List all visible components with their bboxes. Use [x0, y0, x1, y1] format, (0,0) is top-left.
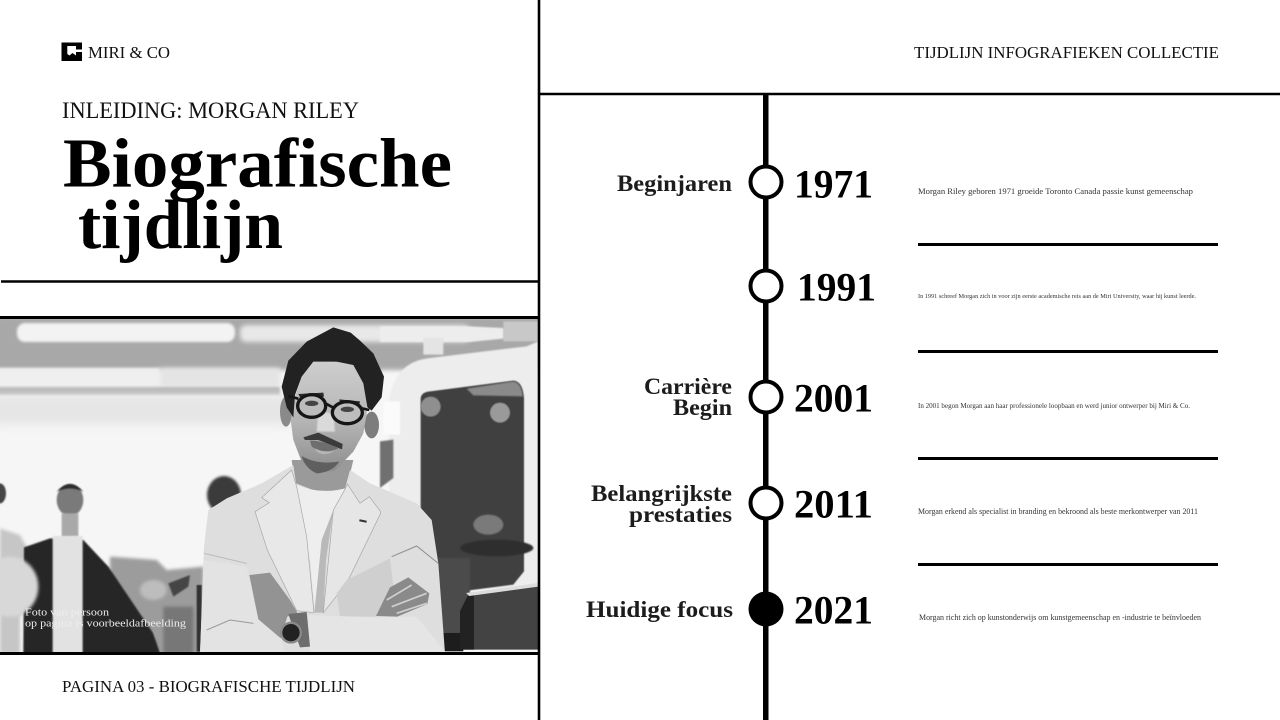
photo: portrait of person	[0, 316, 550, 654]
brand logo	[62, 42, 170, 62]
footer page label: PAGINA 03 - BIOGRAFISCHE TIJDLIJN	[62, 677, 355, 696]
man	[200, 327, 447, 653]
office background	[0, 316, 550, 653]
hair	[282, 327, 384, 417]
description: Morgan Riley geboren 1971 groeide Toronto Canada passie kunst gemeenschap	[918, 186, 1193, 196]
year: 1991	[797, 264, 876, 310]
body	[200, 460, 447, 653]
photo caption	[25, 606, 187, 630]
lapels	[255, 470, 314, 613]
divider	[918, 243, 1218, 246]
year: 1971	[794, 162, 873, 206]
divider	[918, 457, 1218, 460]
lips	[310, 441, 338, 451]
label	[591, 481, 732, 527]
glasses	[298, 395, 362, 424]
label: prestaties	[629, 502, 732, 527]
brand name: MIRI & CO	[88, 43, 170, 62]
description: Morgan erkend als specialist in branding en bekroond als beste merkontwerper van 2011	[918, 507, 1198, 516]
label: Huidige focus	[586, 597, 733, 622]
event 2001	[644, 374, 1190, 420]
description: In 1991 schreef Morgan zich in voor zijn eerste academische reis aan de Miri University, waar hij kunst leerde.	[918, 293, 1196, 300]
year: 2001	[794, 376, 873, 420]
blurred person behind shoulder	[207, 476, 241, 514]
description: In 2001 begon Morgan aan haar professionele loopbaan en werd junior ontwerper bij Miri & Co.	[918, 402, 1190, 410]
year: 2021	[794, 588, 873, 632]
marker	[750, 166, 782, 198]
marker	[748, 592, 784, 626]
pin	[359, 519, 367, 523]
moustache	[303, 433, 343, 449]
event 1991	[750, 264, 1196, 310]
photo frame	[0, 318, 538, 654]
goatee	[302, 456, 339, 473]
ears	[280, 397, 292, 427]
right hand	[376, 577, 429, 617]
jacket	[200, 465, 445, 653]
face	[291, 360, 367, 473]
icon: logo mark	[62, 42, 82, 61]
subtitle: INLEIDING: MORGAN RILEY	[62, 98, 359, 123]
year: 2011	[794, 482, 873, 526]
label: Beginjaren	[617, 171, 732, 196]
blurred colleagues	[0, 483, 203, 653]
photo caption: Foto van persoon	[25, 606, 110, 618]
marker	[750, 382, 782, 412]
label	[644, 374, 732, 420]
label: Begin	[673, 395, 732, 420]
photo caption: op pagina is voorbeeldafbeelding	[25, 618, 187, 630]
timeline axis	[763, 94, 768, 720]
lower sleeve	[340, 616, 446, 652]
pocket fold	[337, 558, 393, 617]
event 2011	[591, 481, 1198, 527]
eyes	[305, 401, 318, 406]
eyebrows	[298, 393, 360, 405]
marker	[750, 270, 782, 302]
marker	[750, 488, 782, 518]
title: tijdlijn	[78, 187, 283, 264]
head	[280, 327, 384, 473]
neck	[292, 460, 354, 491]
timeline	[586, 94, 1218, 720]
title	[63, 126, 452, 264]
label: Belangrijkste	[591, 481, 732, 506]
description: Morgan richt zich op kunstonderwijs om kunstgemeenschap en -industrie te beïnvloeden	[919, 613, 1201, 622]
watch	[288, 612, 310, 647]
divider	[918, 563, 1218, 566]
left hand	[249, 573, 297, 638]
nose and cheek highlight	[317, 412, 335, 432]
window frame and dark screen	[380, 321, 540, 651]
divider	[918, 350, 1218, 353]
collection label: TIJDLIJN INFOGRAFIEKEN COLLECTIE	[914, 43, 1219, 62]
label: Carrière	[644, 374, 732, 399]
t-shirt	[295, 484, 346, 613]
event 1971	[617, 162, 1193, 206]
title: Biografische	[63, 126, 452, 202]
event 2021	[586, 588, 1201, 632]
